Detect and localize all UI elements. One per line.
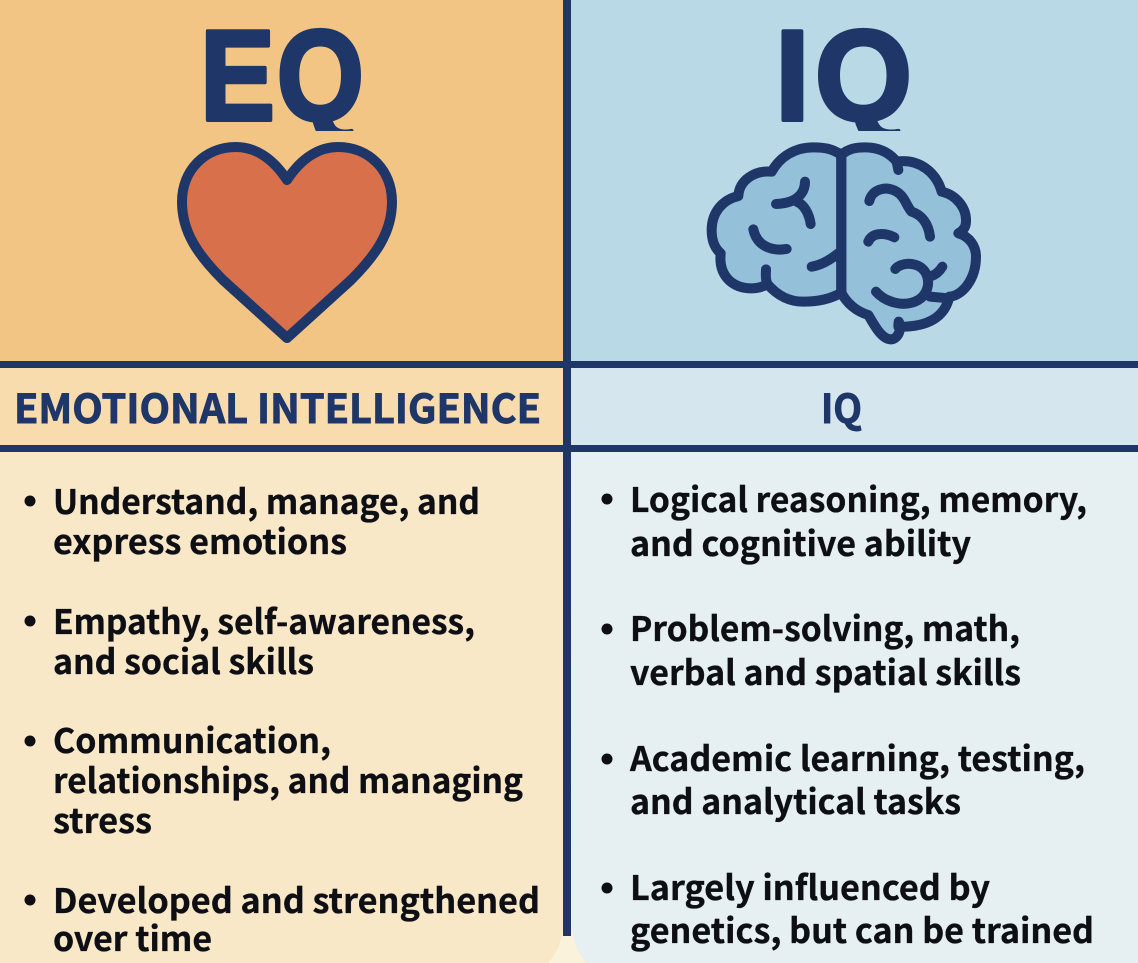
bullet 4	[24, 894, 36, 906]
item 2: Empathy, self-awareness,	[53, 595, 475, 644]
item 2: verbal and spatial skills	[630, 646, 1021, 695]
item 2	[630, 602, 1021, 695]
item 1: express emotions	[53, 515, 347, 564]
item 4	[53, 874, 540, 961]
icon: heart	[182, 147, 392, 338]
item 3	[629, 732, 1085, 824]
heading: Emotional Intelligence: EMOTIONAL INTELLIGENCE	[14, 377, 541, 435]
divider: vertical rule	[563, 0, 571, 936]
item 4: genetics, but can be trained	[630, 904, 1094, 953]
brain left hemisphere	[712, 147, 841, 302]
title: EQ: EQ	[200, 4, 364, 148]
title: IQ: IQ	[775, 3, 912, 147]
item 1	[53, 475, 480, 564]
item 3: Academic learning, testing,	[629, 732, 1085, 781]
list: EQ traits	[24, 475, 540, 961]
panel: EQ header	[0, 0, 564, 362]
item 1: Understand, manage, and	[53, 475, 480, 524]
item 4: Developed and strengthened	[53, 874, 540, 923]
item 2	[53, 595, 475, 684]
item 1: Logical reasoning, memory,	[630, 473, 1087, 522]
bullet 3	[602, 754, 612, 764]
item 4: Largely influenced by	[630, 861, 990, 910]
divider: first horizontal rule	[0, 361, 1138, 368]
brain sulci	[753, 153, 948, 304]
brain right hemisphere	[841, 147, 976, 339]
item 3: and analytical tasks	[630, 775, 961, 824]
item 3: stress	[53, 794, 152, 843]
item 1	[630, 473, 1087, 566]
bullet 2	[24, 616, 36, 626]
panel: IQ label band	[569, 367, 1138, 447]
panel: IQ list background	[571, 451, 1138, 963]
panel: EQ list background	[0, 451, 563, 963]
bullet 3	[24, 736, 36, 746]
bullet 1	[24, 496, 36, 506]
heading: IQ: IQ	[821, 377, 862, 435]
panel: EQ label band	[0, 367, 564, 447]
bullet 1	[602, 494, 612, 504]
item 2: Problem-solving, math,	[630, 602, 1020, 651]
item 3	[53, 714, 523, 843]
panel: IQ header	[569, 0, 1138, 362]
list: IQ traits	[602, 473, 1094, 953]
item 1: and cognitive ability	[630, 517, 971, 566]
item 4: over time	[53, 912, 212, 961]
item 3: Communication,	[53, 714, 331, 763]
item 2: and social skills	[53, 635, 314, 684]
item 4	[630, 861, 1094, 953]
item 3: relationships, and managing	[53, 754, 523, 803]
bullet 4	[602, 882, 612, 894]
divider: second horizontal rule	[0, 445, 1138, 452]
icon: brain	[712, 147, 976, 339]
bullet 2	[602, 624, 612, 634]
